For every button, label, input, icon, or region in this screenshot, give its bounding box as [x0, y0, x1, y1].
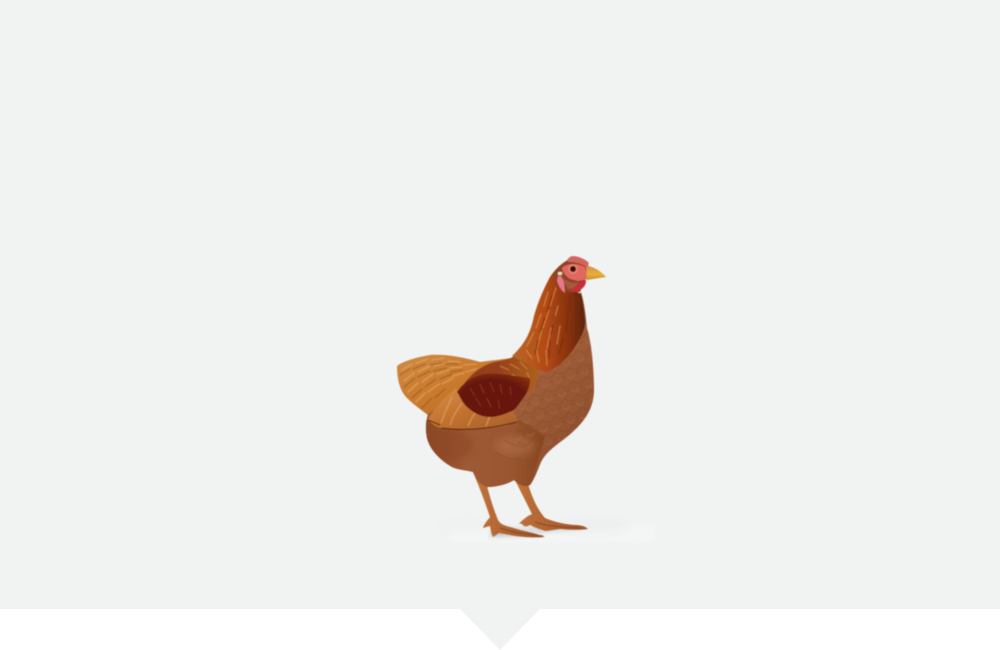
back: cape joining tail and neck — [460, 352, 540, 396]
wing lower orange feathers — [428, 388, 518, 429]
wattle — [571, 280, 586, 292]
ground shadow — [436, 522, 655, 542]
tail feathers — [397, 355, 512, 418]
beak — [586, 266, 606, 280]
illustration: hen — [397, 256, 606, 537]
body and breast — [425, 292, 600, 488]
head — [553, 256, 606, 293]
near leg and foot — [475, 477, 545, 537]
eye — [568, 264, 578, 274]
ear lobe — [557, 276, 565, 293]
downward pointer triangle — [460, 609, 540, 650]
far leg and foot — [515, 480, 588, 531]
wing dark red patch — [457, 373, 530, 417]
neck hackle feathers — [512, 258, 585, 372]
